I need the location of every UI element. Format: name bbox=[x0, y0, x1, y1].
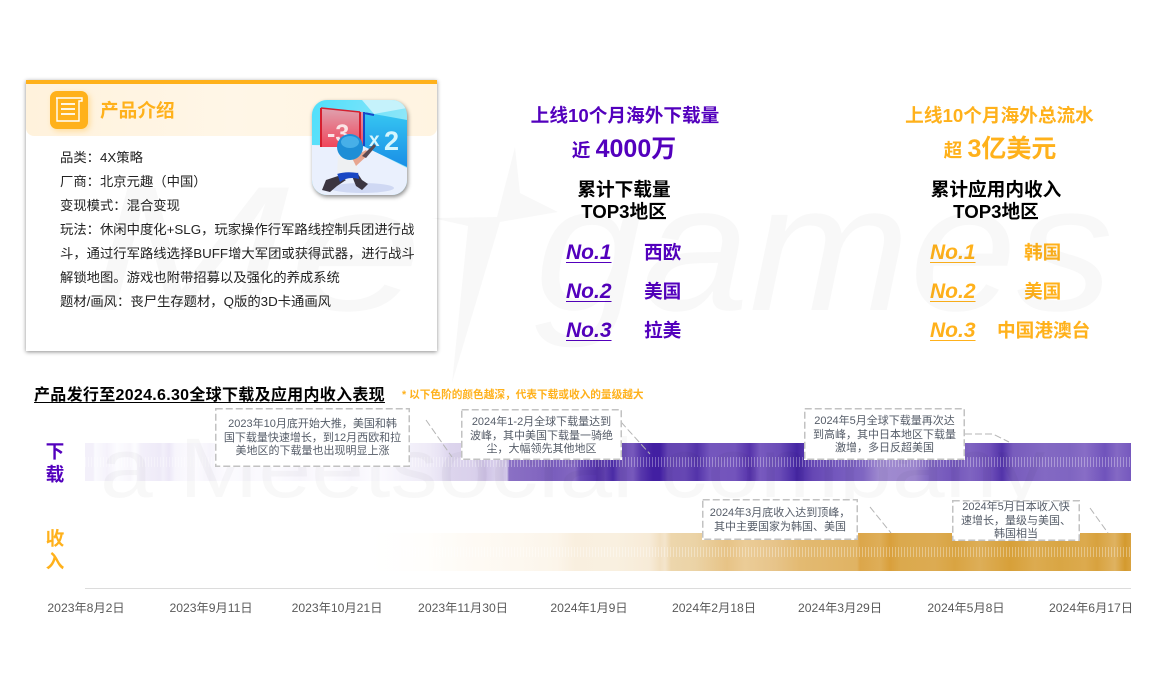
icon: document bbox=[48, 90, 94, 134]
subheading: top 3 revenue regions bbox=[931, 179, 1061, 222]
panel heading: 产品介绍 bbox=[100, 100, 175, 121]
callout: May 2024 downloads: 到高峰，其中日本地区下载量 bbox=[813, 428, 956, 440]
product description text: 厂商：北京元趣（中国） bbox=[60, 174, 207, 189]
rank 2 bbox=[566, 280, 681, 303]
subheading: top 3 download regions: TOP3地区 bbox=[581, 201, 667, 222]
callout: May 2024 downloads bbox=[804, 408, 965, 460]
icon: game app artwork: x bbox=[369, 130, 380, 151]
light tick row inside strip bbox=[85, 547, 1131, 557]
callout: October 2023 push: 美地区的下载量也出现明显上涨 bbox=[236, 445, 390, 457]
panel: product introduction bbox=[26, 80, 437, 351]
heading: downloads in 10 months: 上线10个月海外下载量 bbox=[531, 105, 719, 126]
callout: Jan-Feb 2024 peak: 尘，大幅领先其他地区 bbox=[486, 443, 596, 455]
big number: revenue: 超 3亿美元 bbox=[944, 135, 1056, 163]
callout: Jan-Feb 2024 peak bbox=[461, 409, 622, 460]
callout: March 2024 revenue peak bbox=[702, 499, 858, 540]
rank 1 bbox=[566, 241, 681, 264]
callout: May 2024 downloads: 激增，多日反超美国 bbox=[835, 442, 934, 454]
watermark: Meetgames a Meetsocial company: games bbox=[535, 148, 1113, 349]
label: revenue: 入 bbox=[46, 551, 64, 572]
axis date labels: 2024年3月29日 bbox=[798, 601, 882, 615]
label: revenue: 收 bbox=[46, 528, 64, 549]
rank 3 bbox=[566, 319, 681, 342]
callout: October 2023 push bbox=[215, 408, 410, 467]
axis date labels: 2024年1月9日 bbox=[550, 601, 628, 615]
axis date labels bbox=[47, 601, 1133, 615]
axis date labels: 2024年5月8日 bbox=[927, 601, 1005, 615]
rank 1 bbox=[930, 241, 1061, 264]
watermark: Meetgames a Meetsocial company: Me bbox=[88, 149, 423, 348]
heading: revenue in 10 months: 上线10个月海外总流水 bbox=[905, 105, 1094, 126]
subheading: top 3 download regions: 累计下载量 bbox=[577, 179, 671, 200]
subheading: top 3 revenue regions: TOP3地区 bbox=[953, 201, 1039, 222]
timeline colour scale note: * 以下色阶的颜色越深，代表下载或收入的量级越大 bbox=[402, 389, 644, 401]
product description text: 解锁地图。游戏也附带招募以及强化的养成系统 bbox=[60, 270, 340, 285]
rank 3: 拉美 bbox=[644, 320, 681, 341]
callout: October 2023 push: 国下载量快速增长，到12月西欧和拉 bbox=[224, 432, 401, 444]
label: downloads: 下 bbox=[46, 441, 64, 462]
label: downloads: 载 bbox=[46, 464, 64, 484]
panel top accent bar bbox=[26, 80, 437, 84]
rank 2: 美国 bbox=[644, 281, 681, 302]
callout: March 2024 revenue peak: 其中主要国家为韩国、美国 bbox=[714, 520, 846, 532]
rank 3: No.3 bbox=[930, 319, 976, 342]
rank 1: 韩国 bbox=[1024, 242, 1061, 263]
product description text bbox=[60, 150, 415, 309]
heat strip: downloads bbox=[85, 443, 1131, 481]
product description text: 斗，通过行军路线选择BUFF增大军团或获得武器，进行战斗 bbox=[60, 246, 415, 261]
axis date labels: 2023年10月21日 bbox=[292, 601, 382, 615]
icon: game app artwork: -3 bbox=[327, 120, 349, 148]
callout: Jan-Feb 2024 peak: 波峰，其中美国下载量一骑绝 bbox=[470, 430, 613, 442]
axis date labels: 2024年2月18日 bbox=[672, 601, 756, 615]
product description text: 变现模式：混合变现 bbox=[60, 198, 180, 213]
callout: October 2023 push: 2023年10月底开始大推，美国和韩 bbox=[228, 418, 397, 430]
product description text: 品类：4X策略 bbox=[60, 150, 143, 165]
callout: Jan-Feb 2024 peak: 2024年1-2月全球下载量达到 bbox=[472, 416, 611, 428]
callout: May 2024 Japan revenue bbox=[952, 500, 1080, 541]
label: downloads bbox=[46, 441, 64, 484]
callout: May 2024 Japan revenue: 2024年5月日本收入快 bbox=[962, 501, 1070, 513]
rank 3 bbox=[930, 319, 1090, 342]
rank 1: No.1 bbox=[566, 241, 612, 264]
callout: May 2024 Japan revenue: 韩国相当 bbox=[994, 528, 1038, 540]
rank 1: No.1 bbox=[930, 241, 976, 264]
watermark: Meetgames a Meetsocial company: a Meetsocial company bbox=[100, 421, 1045, 515]
product description text: 玩法：休闲中度化+SLG，玩家操作行军路线控制兵团进行战 bbox=[60, 222, 414, 237]
icon: game app artwork bbox=[310, 99, 411, 200]
axis date labels: 2023年11月30日 bbox=[418, 601, 508, 615]
rank 2: 美国 bbox=[1024, 281, 1061, 302]
axis date labels: 2024年6月17日 bbox=[1049, 601, 1133, 615]
icon: game app artwork: 2 bbox=[384, 126, 399, 156]
rank 2 bbox=[930, 280, 1061, 303]
rank 2: No.2 bbox=[930, 280, 976, 303]
product description text: 题材/画风：丧尸生存题材，Q版的3D卡通画风 bbox=[60, 294, 331, 309]
axis date labels: 2023年9月11日 bbox=[169, 601, 253, 615]
timeline heading: 产品发行至2024.6.30全球下载及应用内收入表现 bbox=[34, 387, 385, 404]
label: revenue bbox=[46, 528, 64, 572]
rank 3: 中国港澳台 bbox=[997, 320, 1090, 341]
rank 1: 西欧 bbox=[644, 242, 681, 263]
panel: downloads summary bbox=[531, 105, 719, 342]
big number: downloads: 近 4000万 bbox=[572, 135, 676, 163]
callout: May 2024 downloads: 2024年5月全球下载量再次达 bbox=[814, 415, 955, 427]
subheading: top 3 download regions bbox=[577, 179, 671, 222]
subheading: top 3 revenue regions: 累计应用内收入 bbox=[931, 179, 1061, 200]
panel: revenue summary bbox=[905, 105, 1094, 342]
rank 3: No.3 bbox=[566, 319, 612, 342]
callout: March 2024 revenue peak: 2024年3月底收入达到顶峰， bbox=[710, 507, 850, 519]
heat strip: revenue bbox=[85, 533, 1131, 570]
axis date labels: 2023年8月2日 bbox=[47, 601, 125, 615]
time axis bbox=[85, 588, 1131, 589]
rank 2: No.2 bbox=[566, 280, 612, 303]
light tick row inside strip bbox=[85, 457, 1131, 467]
panel header band bbox=[26, 84, 437, 136]
callout: May 2024 Japan revenue: 速增长，量级与美国、 bbox=[961, 514, 1071, 526]
